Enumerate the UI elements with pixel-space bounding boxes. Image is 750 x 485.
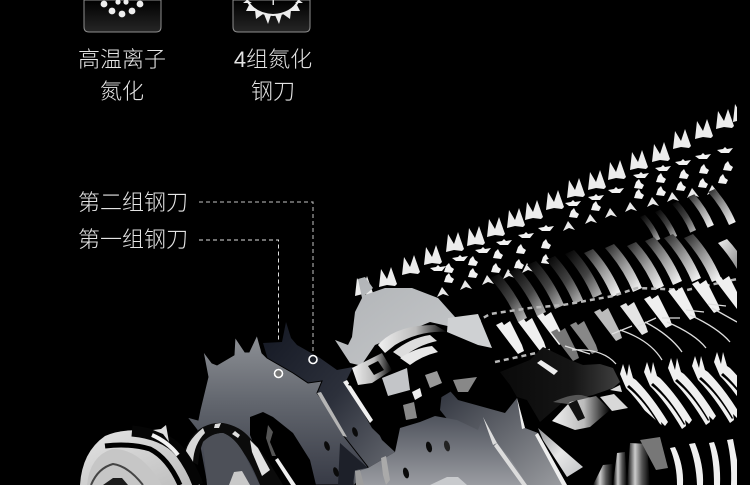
disc edge highlight [317, 392, 347, 437]
marker: first blade set [274, 370, 282, 378]
middle blade stripes [496, 276, 743, 361]
upper teeth row [355, 102, 750, 296]
label: four sets of nitrided steel blades: 4组氮化 [234, 47, 312, 72]
bottom curved stripes [670, 439, 737, 485]
upper curved stripes [490, 189, 750, 322]
silver lower shaft [538, 385, 672, 485]
callout: second blade set: 第二组钢刀 [78, 190, 188, 215]
label: four sets of nitrided steel blades: 钢刀 [251, 79, 295, 104]
rear lower blade disc [440, 383, 567, 485]
marker: second blade set [309, 356, 317, 364]
navy second blade disc [263, 322, 395, 485]
dark centre disc [500, 347, 620, 422]
icon: high-temperature ion nitriding [84, 0, 161, 32]
lower blade disc [356, 416, 527, 485]
label: high-temperature ion nitriding: 氮化 [100, 79, 144, 104]
label: high-temperature ion nitriding: 高温离子 [78, 47, 166, 72]
white blade tips: drum marks [430, 147, 733, 297]
thin trailing lines with cross marks [565, 304, 737, 364]
rear light-grey disc [335, 277, 455, 365]
bottom-left silver end cap [80, 425, 200, 485]
callout: second blade set [78, 190, 313, 353]
lower double-blade stripes [620, 352, 737, 429]
callout: first blade set: 第一组钢刀 [78, 227, 188, 252]
first blade disc [187, 335, 368, 485]
icon: four nitrided steel blades [233, 0, 310, 32]
disc mounting holes [323, 426, 359, 478]
shaver blade assembly illustration [80, 102, 750, 485]
thin jagged bands [476, 279, 737, 362]
bottom-left metal ring [184, 423, 283, 485]
black wedge between discs [362, 410, 380, 436]
disc lower-right shadow [338, 443, 368, 485]
disc inner opening [250, 412, 316, 485]
callout: first blade set [78, 227, 278, 368]
silver upper shaft [348, 314, 492, 420]
